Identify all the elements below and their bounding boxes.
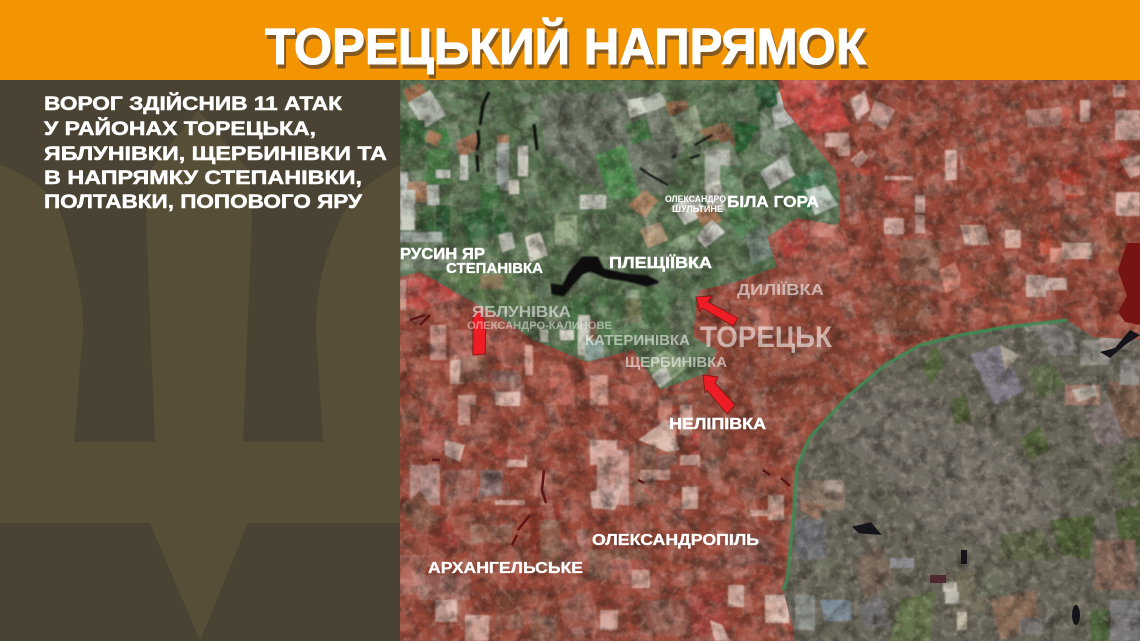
label: Dyliivka: ДИЛІЇВКА [737, 281, 825, 299]
urban area [830, 380, 1060, 545]
label: Oleksandropil: ОЛЕКСАНДРОПІЛЬ [592, 532, 759, 549]
label: Oleksandro-Shultyne: ШУЛЬТИНЕ [672, 204, 723, 215]
map zone: occupied territory (red) [400, 80, 1140, 641]
water bodies in grey zone [857, 330, 1140, 625]
label: Oleksandro-Shultyne [665, 196, 726, 212]
panel: left text panel with trident watermark [0, 80, 400, 641]
trident watermark [0, 110, 400, 641]
label: Rusyn Yar: РУСИН ЯР [400, 246, 485, 263]
panel text: ЯБЛУНІВКИ, ЩЕРБИНІВКИ ТА [44, 143, 387, 165]
reservoir and streams [477, 92, 712, 295]
fields and woods [970, 345, 1025, 405]
label: Nelipivka: НЕЛІПІВКА [669, 416, 766, 433]
label: Shcherbynivka: ЩЕРБИНІВКА [625, 355, 728, 371]
label: Yablunivka: ЯБЛУНІВКА [472, 304, 571, 321]
label: Stepanivka: СТЕПАНІВКА [446, 261, 544, 277]
label: Katerynivka: КАТЕРИНІВКА [585, 333, 691, 349]
top right fields [780, 80, 840, 130]
arrow: Yablunivka attack [471, 310, 486, 355]
label: Arkhanhelske: АРХАНГЕЛЬСЬКЕ [428, 560, 583, 577]
header banner [0, 0, 1140, 80]
panel text: ПОЛТАВКИ, ПОПОВОГО ЯРУ [44, 191, 363, 213]
title: ТОРЕЦЬКИЙ НАПРЯМОК [265, 17, 867, 75]
field mosaic texture: occupied and free farmland [400, 80, 1140, 641]
title: ТОРЕЦЬКИЙ НАПРЯМОК [267, 21, 869, 79]
map zone: grey territory [780, 312, 1140, 641]
label: Toretsk: ТОРЕЦЬК [700, 321, 833, 354]
panel text: У РАЙОНАХ ТОРЕЦЬКА, [44, 116, 316, 140]
label: Pleshchiivka: ПЛЕЩІЇВКА [609, 254, 713, 272]
water bodies in occupied zone [410, 243, 1140, 545]
torets area [690, 340, 860, 440]
label: Oleksandro-Kalynove: ОЛЕКСАНДРО-КАЛИНОВЕ [467, 320, 612, 332]
map labels [400, 194, 833, 577]
map texture [400, 80, 1140, 641]
panel text [44, 91, 387, 213]
south fields [800, 480, 845, 510]
satellite map [400, 80, 1140, 641]
label: Bila Hora: БІЛА ГОРА [727, 194, 819, 211]
panel text: ВОРОГ ЗДІЙСНИВ 11 АТАК [44, 91, 342, 115]
panel text: В НАПРЯМКУ СТЕПАНІВКИ, [44, 167, 362, 189]
map zone: free territory (green) [400, 80, 860, 400]
arrow: Shcherbynivka attack [703, 375, 735, 414]
label: Oleksandro-Shultyne: ОЛЕКСАНДРО [665, 194, 726, 205]
front line edge [783, 320, 1067, 590]
southern fields [400, 405, 420, 445]
left and central fields [400, 275, 458, 310]
arrow: Pleshchiivka attack [696, 296, 738, 326]
